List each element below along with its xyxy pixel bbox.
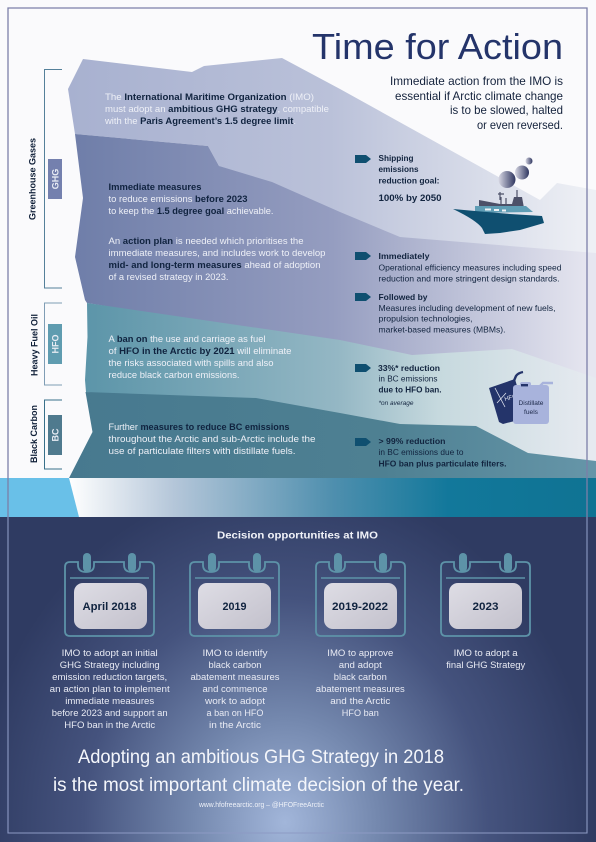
text: BC measures: Further measures to reduce BC emissions [108,422,290,433]
calendar text: April 2018: emission reduction targets, [52,672,167,683]
calendar text: April 2018: IMO to adopt an initial [62,648,158,659]
intro statement: essential if Arctic climate change [395,90,563,103]
dark sea panel [0,517,596,842]
text: followed by: Followed by [378,292,428,302]
text: 99 percent reduction: in BC emissions due to [378,447,464,457]
text: action plan: An action plan is needed which prioritises the [108,236,304,247]
arrow: 99 percent [355,438,371,446]
ice layer: HFO ban [85,303,596,470]
intro statement: or even reversed. [477,119,563,132]
intro statement: is to be slowed, halted [450,104,563,117]
title: Time for Action [312,26,563,67]
calendar: April 2018: April 2018 [82,601,136,613]
calendar text: April 2018: HFO ban in the Arctic [64,720,155,731]
calendar text: April 2018 [50,648,170,731]
text: 99 percent reduction: > 99% reduction [378,436,446,446]
website and handle: www.hfofreearctic.org – @HFOFreeArctic [198,802,324,809]
text: 33 percent reduction: in BC emissions [378,374,438,384]
intro statement [390,75,563,132]
calendar: April 2018 [65,553,154,636]
calendar: 2019: 2019 [222,601,246,613]
calendar text: April 2018: an action plan to implement [50,684,170,695]
text: immediately [378,251,562,284]
calendar text: 2019: and commence [202,684,268,695]
calendar: 2023 [441,553,530,636]
icon: ship [453,158,544,234]
text: 99 percent reduction: HFO ban plus particulate filters. [378,458,506,468]
text: immediate measures: to reduce emissions before 2023 [108,194,248,205]
side label: Heavy Fuel Oil: Heavy Fuel Oil [30,314,40,376]
text: action plan: mid- and long-term measures ahead of adoption [108,260,320,271]
calendar text: 2019: work to adopt [204,696,265,707]
calendar text: 2019: abatement measures [190,672,280,683]
ice layer: immediate measures [75,134,596,400]
text: followed by: Measures including development of new fuels, [378,303,556,313]
text: HFO ban: of HFO in the Arctic by 2021 will eliminate [108,346,292,357]
text: 33 percent reduction: 33%* reduction [378,363,440,373]
text: BC measures [108,422,316,457]
calendar text: 2019: a ban on HFO [206,708,264,719]
text: action plan [108,236,326,283]
arrow: followed by [355,293,371,301]
calendar text: 2019-2022: IMO to approve [327,648,393,659]
closing statement: Adopting an ambitious GHG Strategy in 2018 [78,746,444,768]
calendar text: 2023: IMO to adopt a [454,648,518,659]
calendar text: 2019: in the Arctic [209,720,261,731]
text: IMO strategy: must adopt an ambitious GHG strategy, compatible [105,104,329,115]
ice layer: black carbon [69,392,596,478]
text: HFO ban: reduce black carbon emissions. [108,370,240,381]
side label: Heavy Fuel Oil [30,303,62,385]
text: 33 percent reduction [378,363,442,407]
text: IMO strategy: The International Maritime Organization (IMO) [105,92,314,103]
side label: Black Carbon: BC [50,428,60,442]
side label: Greenhouse Gases: GHG [50,169,60,189]
intro statement: Immediate action from the IMO is [390,75,563,88]
calendar text: 2019-2022: and the Arctic [330,696,390,707]
heading: decision opportunities: Decision opportunities at IMO [217,530,378,542]
side label: Heavy Fuel Oil: HFO [50,334,60,354]
text: 99 percent reduction [378,436,506,468]
text: IMO strategy: with the Paris Agreement’s 1.5 degree limit. [104,116,296,127]
text: shipping goal [378,153,442,204]
icon: fuel cans: Distillate [519,400,544,407]
icon: fuel cans: HFO [504,394,518,403]
calendar: 2023: 2023 [472,601,498,613]
arrow: 33 percent [355,364,371,372]
icon: fuel cans [489,372,553,424]
arrow: immediately [355,252,371,260]
calendar: 2019 [190,553,279,636]
side label: Black Carbon [29,400,62,469]
text: shipping goal: emissions [378,164,419,174]
calendar text: 2019-2022: black carbon [334,672,387,683]
text: BC measures: throughout the Arctic and sub-Arctic include the [108,434,316,445]
calendar: 2019-2022 [316,553,405,636]
text: HFO ban: the risks associated with spills and also [108,358,274,369]
text: immediate measures: to keep the 1.5 degree goal achievable. [108,206,274,217]
text: immediately: reduction and more stringent design standards. [378,274,560,284]
text: 33 percent reduction: *on average [378,400,414,407]
text: immediate measures: Immediate measures [108,182,202,193]
calendar text: 2019-2022 [316,648,405,719]
calendar text: 2019-2022: HFO ban [342,708,379,719]
text: immediately: Immediately [378,251,430,261]
text: immediate measures [108,182,274,217]
text: action plan: of a revised strategy in 2023. [108,272,228,283]
calendar text: 2023: final GHG Strategy [446,660,525,671]
text: shipping goal: reduction goal: [378,176,440,186]
text: 33 percent reduction: due to HFO ban. [378,384,442,394]
text: immediately: Operational efficiency measures including speed [378,262,562,272]
text: followed by: propulsion technologies, [378,314,472,324]
text: IMO strategy [104,92,329,127]
calendar text: 2019: black carbon [208,660,262,671]
text: BC measures: use of particulate filters with distillate fuels. [108,446,296,457]
text: action plan: immediate measures, and includes work to develop [108,248,326,259]
side label: Black Carbon: Black Carbon [29,405,39,463]
calendar text: 2019-2022: abatement measures [316,684,405,695]
text: followed by [378,292,556,334]
arrow: shipping goal [355,155,371,163]
text: shipping goal: Shipping [378,153,414,163]
calendar text: April 2018: before 2023 and support an [52,708,168,719]
ice layer: GHG strategy [68,58,596,300]
calendar text: 2019-2022: and adopt [339,660,382,671]
calendar text: 2023 [446,648,525,671]
side label: Greenhouse Gases [28,70,62,288]
closing statement [53,746,464,796]
text: HFO ban [108,334,292,381]
calendar: 2019-2022: 2019-2022 [332,601,388,613]
text: followed by: market-based measures (MBMs). [378,324,506,334]
calendar text: 2019: IMO to identify [202,648,268,659]
calendar text: 2019 [190,648,280,731]
water band [0,478,596,517]
closing statement: is the most important climate decision of the year. [53,774,464,796]
icon: fuel cans: fuels [524,409,539,416]
text: HFO ban: A ban on the use and carriage as fuel [108,334,266,345]
side label: Greenhouse Gases: Greenhouse Gases [28,138,38,220]
calendar text: April 2018: GHG Strategy including [60,660,160,671]
text: shipping goal: 100% by 2050 [378,193,442,204]
calendar text: April 2018: immediate measures [65,696,154,707]
